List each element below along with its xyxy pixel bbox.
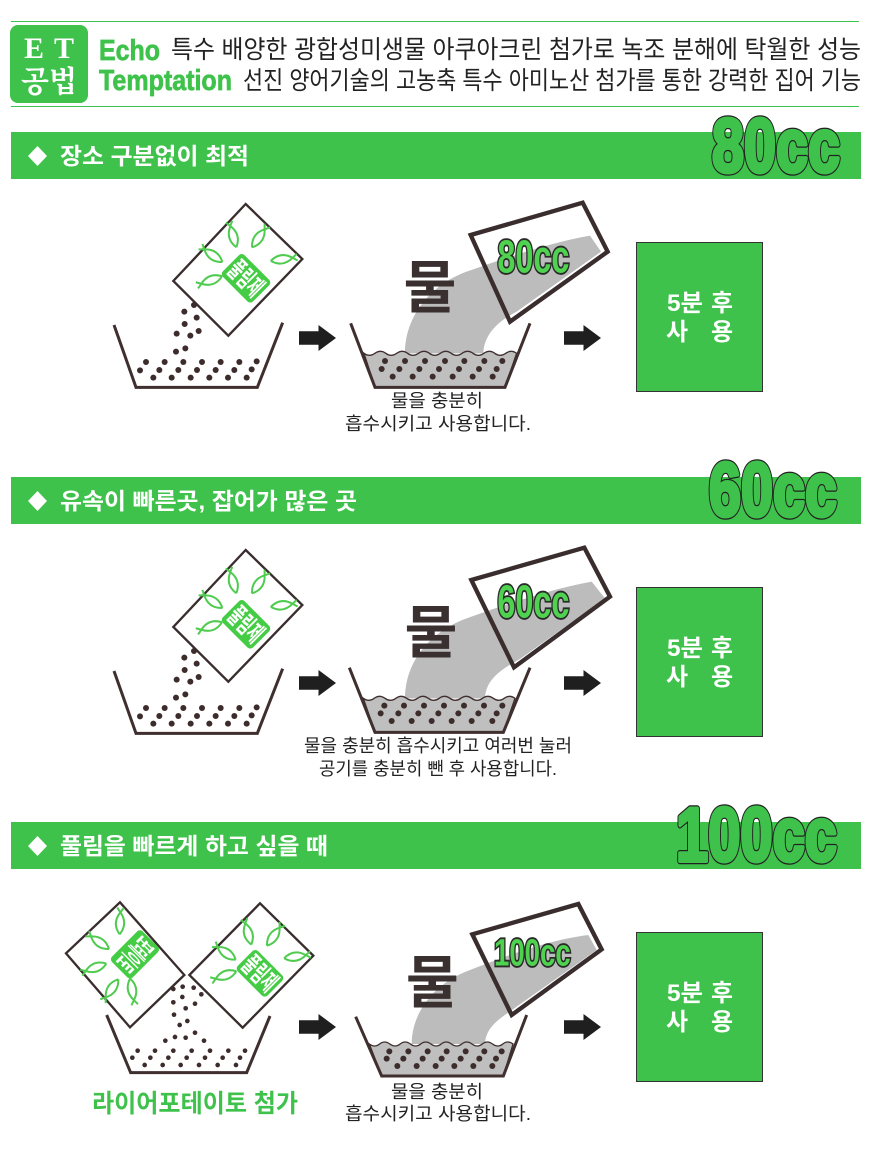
result box: 5분 후 사용: 5분 [667, 980, 703, 1007]
illustration: water cup pouring into basin: 물 [404, 256, 456, 320]
caption: 물을 충분히 흡수시키고 여러번 눌러 [304, 736, 572, 756]
header top rule [11, 21, 859, 22]
result box: 5분 후 사용: 후 [711, 290, 733, 317]
heading bar: 장소 구분없이 최적 [11, 132, 861, 179]
illustration: water cup pouring into basin [356, 903, 602, 1076]
heading bar: 유속이 빠른곳, 잡어가 많은 곳: 유속이 빠른곳, 잡어가 많은 곳 [60, 488, 357, 514]
dosage label: 60cc: 60cc [709, 448, 837, 533]
caption: 물을 충분히 [391, 1082, 483, 1102]
panel: section 2 (60cc) [11, 448, 861, 779]
badge: ET 공법: 공법 [21, 66, 77, 99]
illustration: water cup pouring into basin [351, 202, 608, 387]
result box: 5분 후 사용: 후 [711, 635, 733, 662]
result box: 5분 후 사용: 사 [666, 319, 688, 346]
illustration: bag pouring into basin [114, 550, 302, 733]
heading bar: 장소 구분없이 최적: 장소 구분없이 최적 [60, 143, 249, 169]
badge: ET 공법: E T [24, 32, 74, 65]
illustration: bag pouring into basin: 풀림제 [222, 602, 269, 648]
result box: 5분 후 사용: 5분 [667, 635, 703, 662]
caption: 흡수시키고 사용합니다. [345, 414, 531, 434]
caption: 공기를 충분히 뺀 후 사용합니다. [319, 759, 557, 779]
bag: left [66, 902, 184, 1027]
arrow [299, 1014, 336, 1040]
arrow [564, 325, 601, 351]
bag: right [189, 903, 313, 1028]
caption [345, 1082, 531, 1124]
caption: 물을 충분히 [391, 391, 483, 411]
result box: 5분 후 사용: 후 [711, 980, 733, 1007]
result box: 5분 후 사용: 용 [711, 319, 733, 346]
illustration: water cup pouring into basin: 물 [406, 951, 459, 1015]
text block: Echo line: Echo [99, 35, 160, 67]
heading bar: 풀림을 빠르게 하고 싶을 때 [11, 822, 861, 869]
caption [304, 736, 572, 779]
illustration: water cup pouring into basin: 물 [405, 601, 457, 665]
caption [345, 391, 531, 434]
text block: Temptation line [99, 65, 861, 97]
panel: section 1 (80cc) [11, 104, 861, 434]
illustration: bag pouring into basin [114, 204, 302, 387]
result box: 5분 후 사용: 용 [711, 1009, 733, 1036]
caption: 라이어포테이토 첨가: 라이어포테이토 첨가 [92, 1090, 298, 1118]
illustration: two bags pouring into basin [66, 902, 313, 1073]
illustration: bag pouring into basin: 풀림제 [222, 256, 269, 302]
result box: 5분 후 사용: 5분 [667, 290, 703, 317]
badge: ET 공법 [10, 25, 88, 103]
text block: Temptation line: Temptation [99, 65, 232, 97]
arrow [564, 1014, 601, 1040]
heading bar: 유속이 빠른곳, 잡어가 많은 곳 [11, 477, 861, 524]
panel: section 3 (100cc) [11, 793, 861, 1124]
result box: 5분 후 사용: 사 [666, 1009, 688, 1036]
arrow [299, 325, 336, 351]
dosage label: 60cc: 60cc [709, 448, 837, 533]
illustration: water cup pouring into basin [349, 547, 610, 732]
bag: right: 풀림제 [236, 951, 283, 997]
result box: 5분 후 사용 [636, 588, 762, 736]
result box: 5분 후 사용 [636, 242, 762, 392]
heading bar: 풀림을 빠르게 하고 싶을 때: 풀림을 빠르게 하고 싶을 때 [60, 833, 328, 859]
illustration: water cup pouring into basin: 100cc [494, 932, 571, 975]
arrow [299, 670, 336, 696]
arrow [564, 670, 601, 696]
result box: 5분 후 사용: 사 [666, 664, 688, 691]
illustration: water cup pouring into basin: 80cc [497, 231, 569, 283]
illustration: water cup pouring into basin: 60cc [497, 576, 569, 628]
text block: Echo line: 특수 배양한 광합성미생물 아쿠아크린 첨가로 녹조 분해에 탁월한 성능 [171, 36, 861, 64]
result box: 5분 후 사용 [636, 932, 762, 1082]
caption: 흡수시키고 사용합니다. [345, 1104, 531, 1124]
bag: left: 포테이토 [111, 930, 158, 977]
header bottom rule [11, 106, 859, 107]
result box: 5분 후 사용: 용 [711, 664, 733, 691]
